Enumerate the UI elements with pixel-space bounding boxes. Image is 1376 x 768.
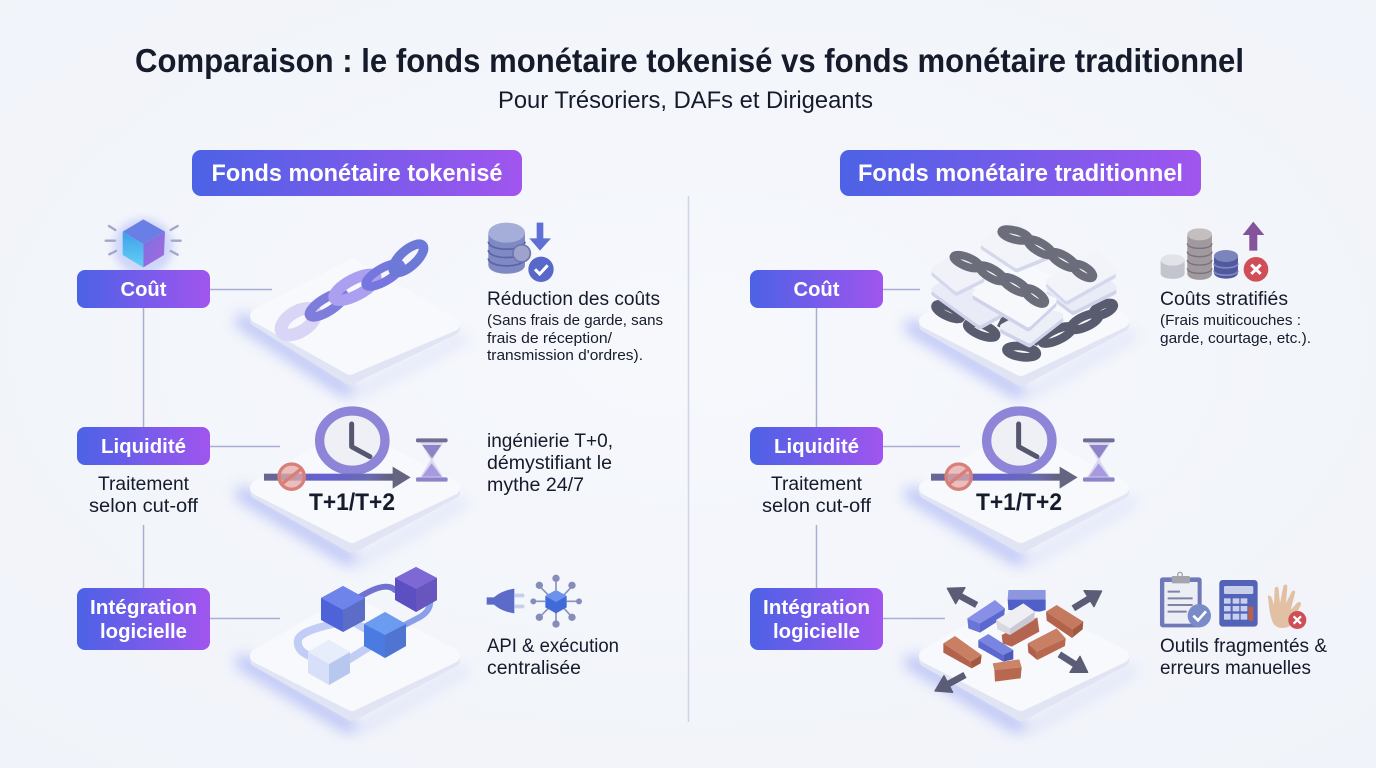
icon: glowing blockchain cube	[106, 218, 181, 275]
benefit: coûts stratifiés	[1160, 222, 1311, 347]
scatter arrows	[935, 588, 1102, 692]
cube: blue	[321, 586, 365, 632]
text: coûts stratifiés: garde, courtage, etc.).	[1160, 330, 1311, 347]
icon: coins and down arrow	[488, 223, 554, 282]
illustration: single tokenised chain on a platform	[240, 239, 465, 397]
pill: Coût	[750, 270, 883, 308]
text: API	[487, 636, 619, 679]
title: Comparaison : le fonds monétaire tokenisé vs fonds monétaire traditionnel	[135, 42, 1244, 79]
illustration: connected cubes on a platform	[243, 567, 463, 728]
pill: Liquidité: Liquidité	[774, 436, 859, 458]
panel: fonds monétaire tokenisé	[77, 150, 663, 728]
lower chain layer	[934, 300, 1116, 359]
pill: Intégration logicielle: logicielle	[773, 621, 860, 643]
cube: azure	[364, 612, 406, 658]
pill: Coût: Coût	[794, 279, 840, 301]
orange brick, front	[993, 659, 1022, 682]
text: outils fragmentés: Outils fragmentés &	[1160, 636, 1327, 657]
blue brick, left	[967, 600, 1005, 633]
middle tiles	[935, 222, 1113, 344]
top tiles	[984, 226, 1046, 269]
text: ingénierie T+0: démystifiant le	[487, 453, 612, 474]
text: ingénierie T+0	[487, 431, 613, 496]
pill: Intégration logicielle: logicielle	[100, 621, 187, 643]
orange brick, middle	[1028, 628, 1066, 660]
pill: Coût	[77, 270, 210, 308]
subtitle: Pour Trésoriers, DAFs et Dirigeants	[498, 87, 873, 114]
orange brick, left	[943, 636, 982, 668]
pill: Coût: Coût	[120, 279, 167, 301]
illustration: clock, arrow and hourglass T+1/T+2	[243, 411, 463, 560]
pill: Intégration logicielle: Intégration	[763, 597, 870, 619]
panel: fonds monétaire traditionnel	[750, 150, 1327, 728]
text: ingénierie T+0: ingénierie T+0,	[487, 431, 613, 452]
text: API: API & exécution	[487, 636, 619, 657]
pill: Liquidité: Liquidité	[101, 436, 186, 458]
text: API: centralisée	[487, 658, 581, 679]
icon: coin stacks, up arrow, red cross	[1161, 222, 1268, 282]
heading: tokenisé: Fonds monétaire tokenisé	[212, 160, 502, 187]
orange brick, right	[1046, 605, 1083, 638]
text: outils fragmentés	[1160, 636, 1327, 679]
text: traitement selon cut-off: Traitement	[771, 474, 863, 495]
illustration: stacked tiles and chains	[912, 222, 1132, 393]
blue bar, back	[1008, 590, 1046, 612]
benefit: API et exécution centralisée	[487, 575, 619, 679]
benefit: réduction des coûts	[487, 223, 663, 364]
heading: traditionnel: Fonds monétaire traditionnel	[858, 160, 1183, 187]
text: traitement selon cut-off	[762, 474, 872, 517]
illustration: clock, arrow and hourglass T+1/T+2: T+1/T+2	[976, 489, 1062, 516]
icon: clipboard, calculator, hand	[1160, 572, 1306, 629]
icon: plug and hub	[487, 575, 582, 628]
text: traitement selon cut-off	[89, 474, 199, 517]
text: coûts stratifiés: Coûts stratifiés	[1160, 289, 1288, 310]
pill: Intégration logicielle	[750, 588, 883, 650]
text: traitement selon cut-off: selon cut-off	[89, 496, 199, 517]
cube: pale	[308, 640, 350, 685]
upper chains	[952, 227, 1095, 307]
white brick	[996, 603, 1035, 635]
text: ingénierie T+0: mythe 24/7	[487, 475, 584, 496]
text: traitement selon cut-off: selon cut-off	[762, 496, 872, 517]
text: réduction des coûts: frais de réception/	[487, 330, 613, 347]
text: outils fragmentés: erreurs manuelles	[1160, 658, 1311, 679]
problem: outils fragmentés et erreurs manuelles	[1160, 572, 1327, 679]
text: coûts stratifiés	[1160, 289, 1311, 347]
pill: Intégration logicielle	[77, 588, 210, 650]
orange brick, centre	[1002, 617, 1039, 647]
text: réduction des coûts	[487, 289, 663, 364]
cube: violet	[395, 567, 437, 612]
text: traitement selon cut-off: Traitement	[98, 474, 190, 495]
pill: Liquidité	[750, 427, 883, 465]
illustration: clock, arrow and hourglass T+1/T+2	[912, 411, 1132, 560]
pill: Liquidité	[77, 427, 210, 465]
blue brick, front	[978, 634, 1013, 662]
text: coûts stratifiés: (Frais muiticouches :	[1160, 312, 1301, 329]
text: réduction des coûts: transmission d'ordres).	[487, 347, 643, 364]
illustration: clock, arrow and hourglass T+1/T+2: T+1/T+2	[309, 489, 395, 516]
heading: tokenisé	[192, 150, 522, 196]
text: réduction des coûts: Réduction des coûts	[487, 289, 660, 310]
heading: traditionnel	[840, 150, 1201, 196]
illustration: scattered bricks and arrows	[912, 588, 1132, 728]
text: réduction des coûts: (Sans frais de garde, sans	[487, 312, 663, 329]
pill: Intégration logicielle: Intégration	[90, 597, 197, 619]
